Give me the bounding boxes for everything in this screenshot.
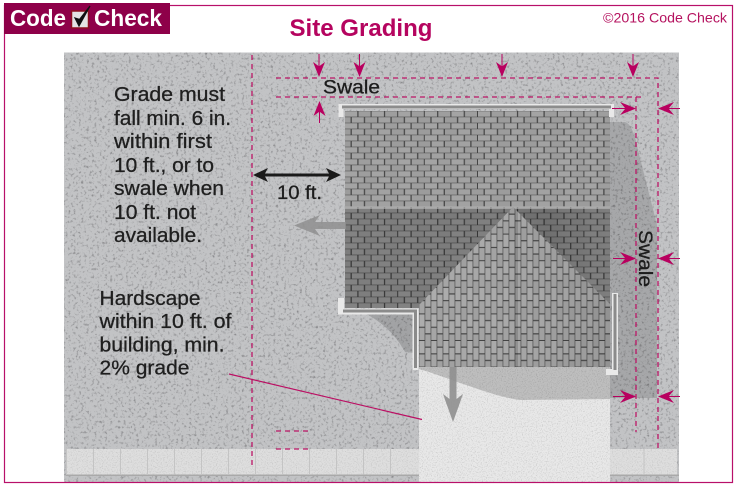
text block: hardscape requirement: building, min. — [100, 334, 224, 356]
roof: gable valley — [515, 210, 518, 367]
text block: grade requirement: available. — [114, 224, 202, 247]
logo: Code Check: Code — [10, 5, 66, 31]
logo: Code Check — [4, 3, 170, 34]
leader line: hardscape — [229, 374, 422, 420]
label: 10 ft: 10 ft. — [277, 182, 322, 204]
title: Site Grading — [290, 15, 432, 42]
sidewalk — [66, 449, 679, 476]
driveway shadow — [419, 367, 610, 400]
roof: ridge line — [345, 206, 610, 209]
text block: hardscape requirement: within 10 ft. of — [98, 310, 232, 333]
roof: house plan — [345, 111, 610, 367]
text block: grade requirement: swale when — [114, 177, 224, 200]
text block: grade requirement: fall min. 6 in. — [114, 107, 231, 130]
icon: check box — [72, 6, 90, 28]
drainage arrow: west — [294, 215, 346, 236]
roof: shaded lower slope — [345, 208, 610, 308]
ground: textured lot — [64, 52, 679, 482]
text block: grade requirement: 10 ft. not — [114, 201, 196, 224]
gutter: top — [341, 106, 612, 117]
logo: Code Check: Check — [94, 5, 162, 31]
dashed lines: swale and ten foot limit — [252, 55, 658, 468]
driveway — [419, 367, 610, 482]
text block: hardscape requirement: Hardscape — [100, 287, 200, 310]
drainage arrow: south — [443, 367, 463, 422]
text block: grade requirement: 10 ft., or to — [114, 154, 214, 177]
roof: gable shading — [419, 207, 610, 367]
notch shadow by entry — [362, 312, 414, 353]
text block: grade requirement — [113, 83, 231, 247]
roof: front gable — [419, 207, 610, 367]
text block: hardscape requirement: 2% grade — [100, 356, 190, 380]
label: swale top: Swale — [323, 76, 380, 98]
copyright: ©2016 Code Check — [603, 10, 728, 26]
label: swale side: Swale — [634, 230, 656, 287]
dimension arrow: 10 ft — [253, 168, 341, 182]
east side house shadow — [610, 122, 657, 398]
text block: grade requirement: Grade must — [114, 83, 225, 106]
swale arrows: east side — [612, 102, 680, 403]
gutter: east side — [606, 293, 615, 372]
text block: hardscape requirement — [98, 287, 232, 380]
gutter: entry notch — [341, 298, 416, 370]
text block: grade requirement: within first — [113, 130, 212, 153]
roof: main field of shingles — [345, 111, 610, 367]
swale arrows: top — [313, 54, 639, 123]
